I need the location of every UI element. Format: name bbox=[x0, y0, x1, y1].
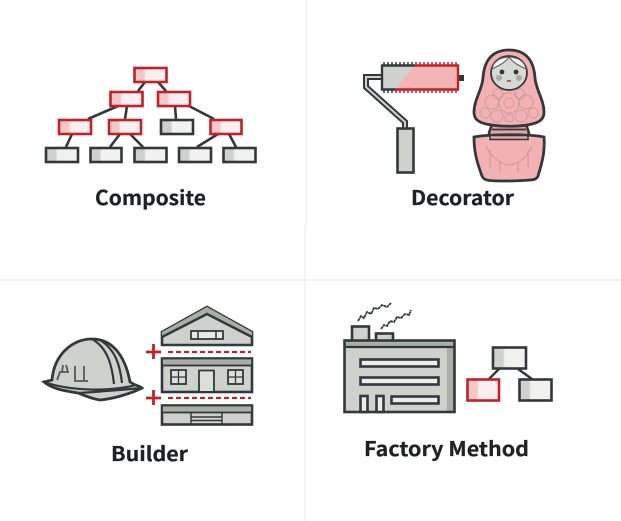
icon: red plus signs and dashes bbox=[146, 344, 251, 405]
icon: paint roller bbox=[366, 62, 464, 172]
heading: Builder: Builder bbox=[111, 438, 188, 467]
heading: Composite: Composite bbox=[95, 182, 206, 211]
icon: house layers bbox=[162, 307, 252, 424]
heading: Decorator: Decorator bbox=[411, 182, 514, 211]
icon: composite tree bbox=[46, 68, 256, 162]
icon: factory bbox=[344, 303, 455, 412]
icon: nesting doll bbox=[474, 50, 544, 181]
heading: Factory Method: Factory Method bbox=[364, 433, 529, 462]
panel: composite bbox=[46, 68, 256, 211]
panel: factory method bbox=[344, 303, 552, 462]
panel: decorator bbox=[366, 50, 544, 211]
panel: builder bbox=[44, 307, 252, 467]
icon: factory diagram bbox=[468, 348, 552, 400]
icon: hard hat bbox=[44, 339, 142, 400]
